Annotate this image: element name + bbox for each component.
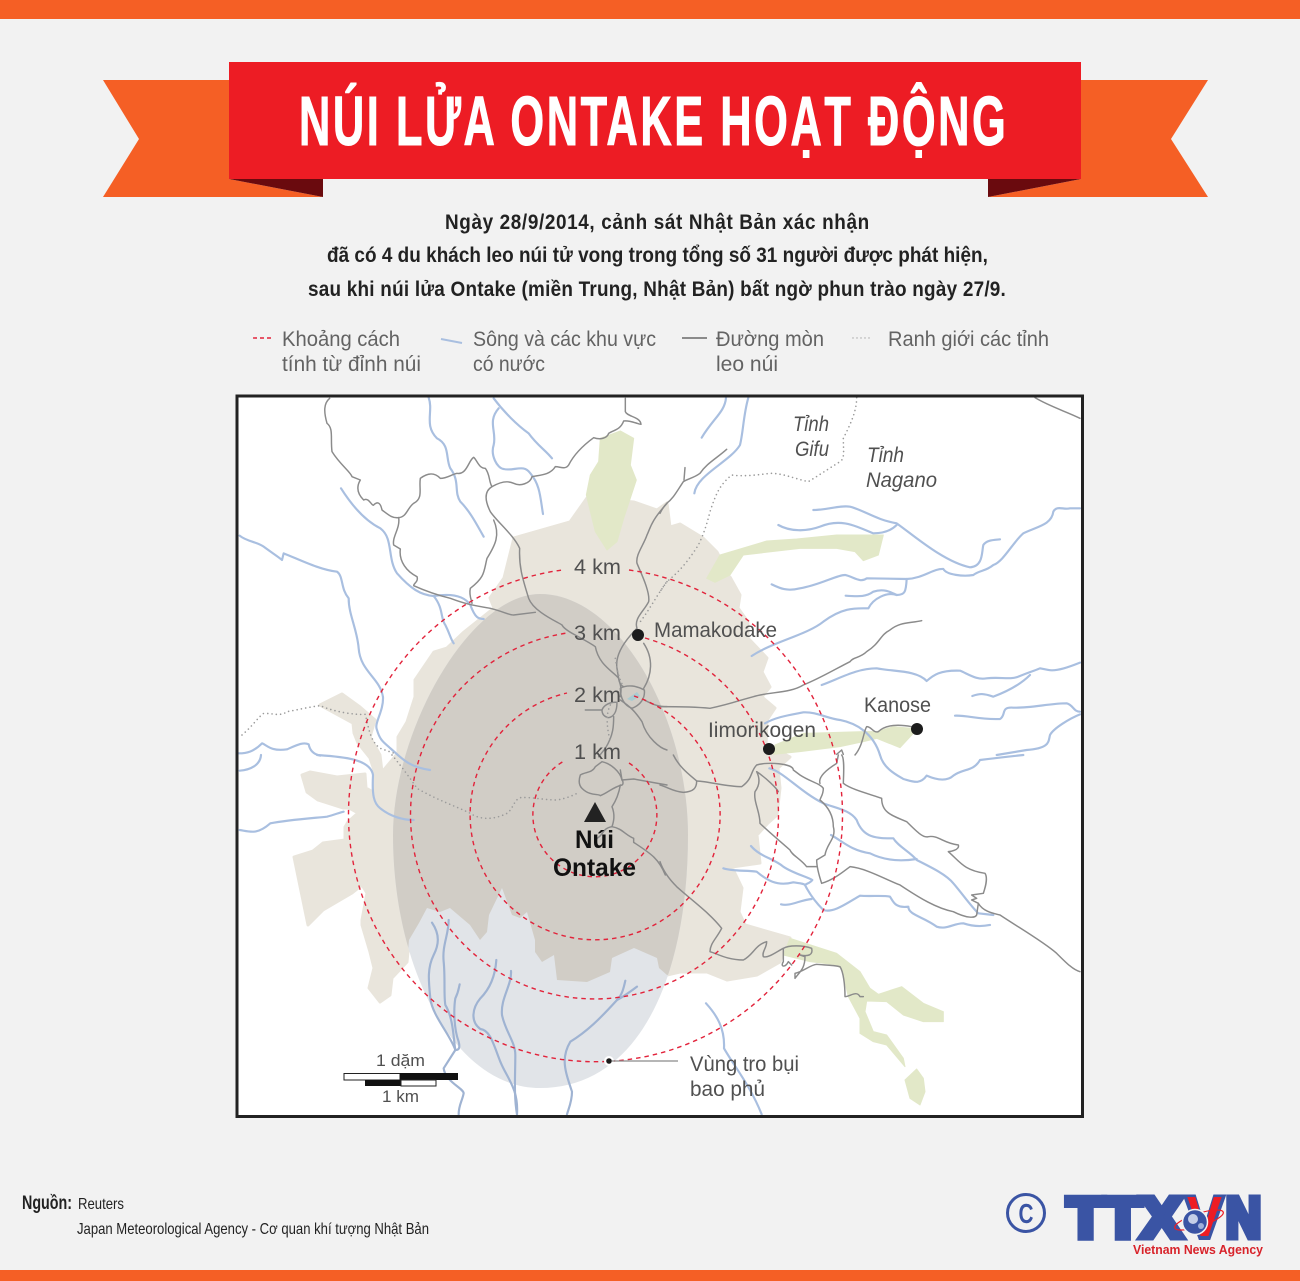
left ribbon fold [229,179,323,197]
place: Kanose: Kanose [864,694,931,717]
TTXVN logo: Vietnam News Agency [1133,1242,1264,1257]
distance labels: 4 km [574,556,621,579]
title: NÚI LỬA ONTAKE HOẠT ĐỘNG [299,82,1006,161]
summit: Mount Ontake: Núi [575,826,614,854]
TTXVN logo [1067,1184,1264,1257]
source credits: Nguồn: [22,1193,72,1214]
TTXVN logo: N [1226,1186,1261,1250]
bottom orange bar [0,1270,1300,1281]
right ribbon fold [988,179,1081,197]
distance labels: 1 km [574,741,621,764]
label: Gifu prefecture [794,414,829,456]
title banner [103,62,1208,197]
legend: distance: tính từ đỉnh núi [282,353,421,376]
scale bar: 1 km [382,1087,419,1106]
place: Mamakodake: Mamakodake [654,619,777,642]
copyright icon [1008,1194,1044,1232]
summit: Mount Ontake: Ontake [553,854,636,882]
green vegetation areas [586,431,943,1105]
TTXVN logo: TTX [1067,1186,1182,1250]
right ribbon tail [988,80,1208,197]
map frame [237,396,1082,1116]
label: Gifu prefecture: Gifu [795,438,829,461]
label: Nagano prefecture [866,444,937,492]
label: Gifu prefecture: Tỉnh [793,413,829,436]
scale bar [344,1054,458,1102]
prefecture borders [242,398,857,818]
globe emblem [1173,1206,1225,1234]
place: Iimorikogen: Iimorikogen [708,719,816,742]
map panel [237,396,1082,1116]
mountain trails [325,398,1080,997]
distance labels: 3 km [574,622,621,645]
legend [253,328,1049,376]
callout: ash coverage [604,1053,799,1101]
intro text: Ngày 28/9/2014, cảnh sát Nhật Bản xác nhận [445,211,869,234]
legend: trails: Đường mòn [716,328,824,351]
label: Nagano prefecture: Tỉnh [867,444,904,467]
top orange bar [0,0,1300,19]
legend: trails: leo núi [716,353,778,376]
source credits: Japan Meteorological Agency - Cơ quan khí tượng Nhật Bản [77,1221,429,1238]
place: Iimorikogen [708,719,816,755]
TTXVN logo: V [1187,1185,1222,1249]
intro text: đã có 4 du khách leo núi tử vong trong tổng số 31 người được phát hiện, [327,244,988,267]
legend: prefecture borders: Ranh giới các tỉnh [888,328,1049,351]
legend: rivers: Sông và các khu vực [473,328,656,351]
intro text: sau khi núi lửa Ontake (miền Trung, Nhật Bản) bất ngờ phun trào ngày 27/9. [308,278,1006,301]
place: Kanose [866,698,930,735]
callout: ash coverage: bao phủ [690,1078,765,1101]
legend: distance [253,328,421,376]
terrain area [294,498,790,1002]
ash coverage area [393,594,688,1088]
distance rings [348,570,842,1062]
legend: distance: Khoảng cách [282,328,400,351]
rivers and water [239,398,1080,1114]
left ribbon tail [103,80,323,197]
TTXVN logo: V [1185,1184,1224,1251]
distance labels [574,556,621,764]
copyright icon: C [1018,1198,1034,1229]
map background [237,396,1082,1116]
scale bar: 1 dặm [376,1051,425,1070]
red banner [229,62,1081,179]
legend: rivers [441,328,656,376]
small crater lake [627,692,640,701]
source credits [22,1193,429,1238]
label: Nagano prefecture: Nagano [866,469,937,492]
summit: Mount Ontake [553,802,636,882]
intro text [308,211,1006,301]
legend: trails [682,328,824,376]
distance labels: 2 km [574,684,621,707]
source credits: Reuters [78,1196,124,1213]
legend: rivers: có nước [473,353,545,376]
callout: ash coverage: Vùng tro bụi [690,1053,799,1076]
